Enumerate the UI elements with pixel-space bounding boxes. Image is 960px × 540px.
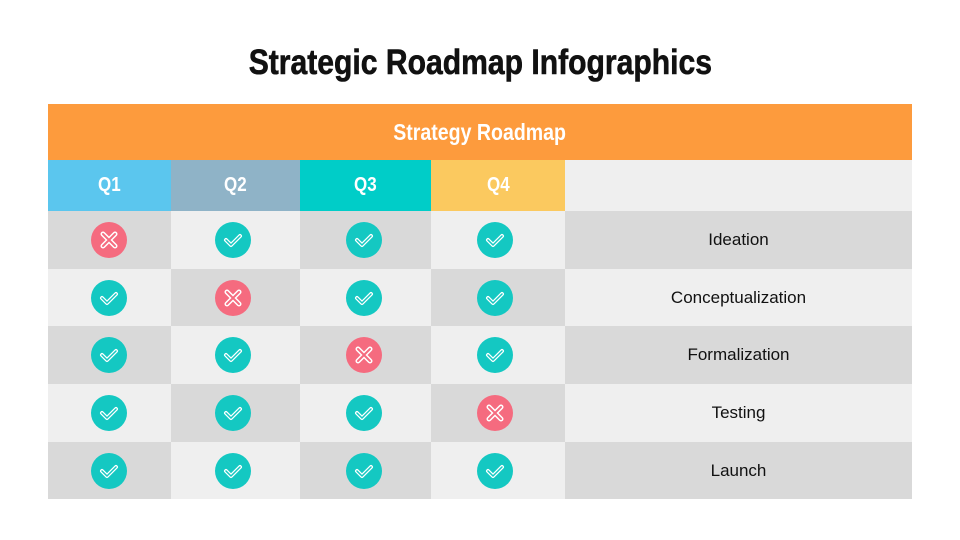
label: Conceptualization: Conceptualization (671, 288, 806, 306)
header Q4: Q4 (487, 174, 509, 196)
header Q2: Q2 (224, 174, 247, 196)
header Q2 (171, 160, 300, 211)
title: Strategic Roadmap Infographics (248, 43, 712, 82)
label: Formalization: Formalization (687, 345, 790, 364)
label: Ideation: Ideation (708, 230, 769, 249)
header: Strategy Roadmap: Strategy Roadmap (394, 118, 566, 144)
header Q4 (431, 160, 565, 211)
header Q3: Q3 (354, 174, 377, 196)
header Q1 (48, 160, 171, 211)
header Q3 (300, 160, 431, 211)
grid rows (48, 211, 912, 499)
header Q1: Q1 (98, 174, 121, 196)
table (48, 104, 912, 499)
header: Strategy Roadmap (48, 104, 912, 160)
label: Testing: Testing (712, 403, 765, 422)
header blank (565, 160, 912, 211)
label: Launch: Launch (711, 460, 766, 480)
